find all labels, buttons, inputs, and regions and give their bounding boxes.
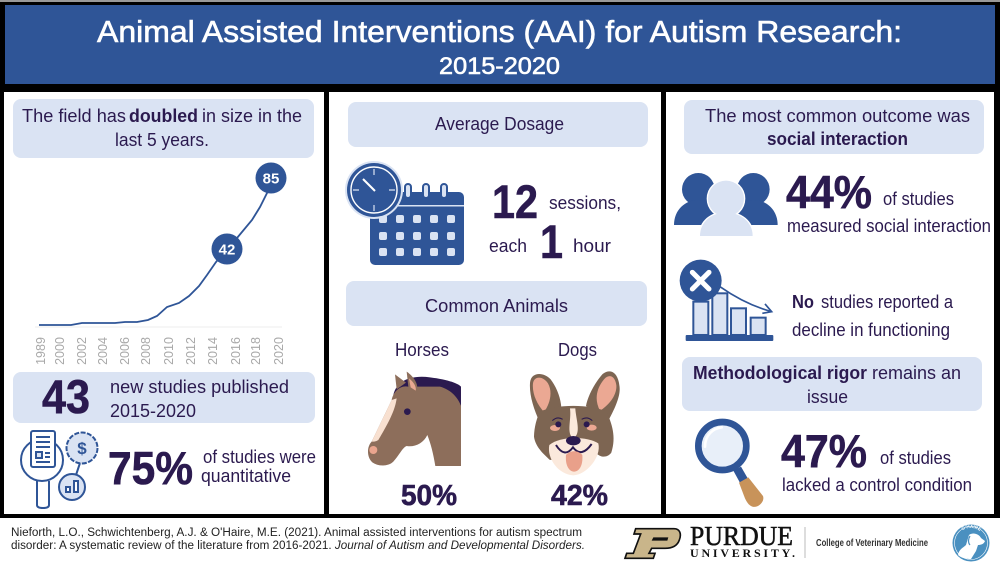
stat: horses 50%: 50% bbox=[401, 480, 457, 512]
stat: 43 new studies: 2015-2020 bbox=[110, 400, 196, 421]
text: no studies reported a decline: decline in functioning bbox=[792, 319, 950, 340]
wordmark: PURDUE: PURDUE bbox=[690, 521, 793, 551]
heading: methodological rigor: Methodological rigor bbox=[693, 362, 867, 383]
stat: 47% lacked control: of studies bbox=[880, 447, 951, 468]
stat: 47% lacked control: 47% bbox=[781, 425, 867, 477]
text: no studies reported a decline: No bbox=[792, 291, 814, 312]
data point: 85 bbox=[256, 162, 286, 194]
text: no studies reported a decline bbox=[792, 291, 954, 340]
logo: O'Haire lab dog badge: O'HAIRE bbox=[962, 524, 982, 531]
stat: 43 new studies: 43 bbox=[42, 370, 90, 423]
stat: 12 sessions, each 1 hour: 1 bbox=[540, 215, 563, 268]
heading: methodological rigor: remains an bbox=[872, 362, 961, 383]
heading: methodological rigor: issue bbox=[807, 386, 848, 407]
label: horses: Horses bbox=[395, 339, 449, 360]
line chart: publications by year: 2012 bbox=[184, 337, 198, 365]
icon: dog bbox=[530, 371, 620, 475]
heading: average dosage: Average Dosage bbox=[435, 113, 564, 134]
heading: common animals bbox=[346, 281, 647, 326]
panel: outcomes and rigor bbox=[666, 92, 994, 514]
line chart: publications by year: 2010 bbox=[162, 337, 176, 365]
line chart: publications by year: 2020 bbox=[272, 337, 286, 365]
text: no studies reported a decline: studies reported a bbox=[821, 291, 954, 312]
stat: 44% social interaction: 44% bbox=[786, 166, 872, 218]
icon: declining bars with cross bbox=[680, 260, 773, 341]
line chart: publications by year: 2002 bbox=[75, 337, 89, 365]
stat: 75% quantitative: 75% bbox=[108, 442, 193, 494]
stat: 43 new studies: new studies published bbox=[110, 376, 289, 397]
heading: field has doubled: doubled bbox=[129, 105, 198, 126]
line chart: publications by year: 2008 bbox=[139, 337, 153, 365]
icon: people group bbox=[674, 173, 778, 236]
divider and college name bbox=[805, 527, 928, 558]
icon: calendar and clock bbox=[345, 161, 464, 265]
stat: 12 sessions, each 1 hour: hour bbox=[573, 235, 611, 256]
citation: Nieforth, L.O., Schwichtenberg, A.J. & O'Haire, M.E. (2021). Animal assisted interventions for autism spectrum bbox=[11, 527, 582, 539]
heading: average dosage bbox=[348, 102, 648, 147]
stat: 12 sessions, each 1 hour: sessions, bbox=[549, 192, 621, 213]
line chart: publications by year: 2006 bbox=[118, 337, 132, 365]
line chart: publications by year: 2014 bbox=[206, 337, 220, 365]
subtitle: 2015-2020 bbox=[439, 53, 560, 80]
wordmark: UNIVERSITY: UNIVERSITY. bbox=[690, 546, 795, 560]
stat: 75% quantitative: of studies were bbox=[203, 446, 316, 467]
logo: O'Haire lab dog badge bbox=[952, 524, 990, 562]
heading: field has doubled: The field has bbox=[22, 105, 126, 126]
stat: 47% lacked control bbox=[781, 425, 972, 495]
logo: Purdue University bbox=[625, 521, 795, 560]
data point: 42: 42 bbox=[219, 242, 235, 258]
heading: most common outcome: The most common outcome was bbox=[705, 105, 970, 126]
stat: 12 sessions, each 1 hour: each bbox=[489, 235, 527, 256]
stat: 12 sessions, each 1 hour bbox=[489, 175, 621, 268]
divider and college name: College of Veterinary Medicine bbox=[816, 537, 928, 549]
line chart: publications by year: 1989 bbox=[34, 337, 48, 365]
stat: 43 new studies bbox=[13, 370, 315, 423]
heading: methodological rigor bbox=[682, 357, 982, 411]
line chart: publications by year: 2004 bbox=[96, 337, 110, 365]
stat: 44% social interaction: of studies bbox=[883, 188, 954, 209]
line chart: publications by year: 2018 bbox=[249, 337, 263, 365]
icon: magnifying glass bbox=[698, 422, 763, 507]
stat: 47% lacked control: lacked a control condition bbox=[782, 474, 972, 495]
line chart: publications by year: 2016 bbox=[229, 337, 243, 365]
line chart: publications by year: 2000 bbox=[53, 337, 67, 365]
icon: horse bbox=[368, 372, 461, 466]
citation bbox=[11, 527, 585, 552]
stat: dogs 42%: 42% bbox=[551, 480, 608, 512]
heading: field has doubled: in size in the bbox=[202, 105, 302, 126]
title: Animal Assisted Interventions (AAI) for Autism Research: bbox=[97, 14, 902, 49]
heading: common animals: Common Animals bbox=[425, 295, 568, 316]
panel: dosage and animals bbox=[329, 92, 661, 514]
heading: field has doubled: last 5 years. bbox=[115, 129, 209, 150]
stat: 75% quantitative: quantitative bbox=[201, 465, 291, 486]
heading: most common outcome: social interaction bbox=[767, 128, 908, 149]
icon: magnifier with document and charts bbox=[21, 431, 98, 508]
panel: field growth bbox=[4, 92, 324, 514]
stat: 75% quantitative bbox=[108, 442, 316, 494]
label: dogs: Dogs bbox=[558, 339, 597, 360]
icon: Purdue P bbox=[625, 529, 680, 558]
citation: disorder: A systematic review of the literature from 2016-2021. Journal of Autism and Developmental Disorders. bbox=[11, 540, 585, 552]
heading: most common outcome bbox=[684, 100, 984, 154]
stat: 12 sessions, each 1 hour: 12 bbox=[492, 175, 538, 228]
data point: 42 bbox=[212, 234, 242, 264]
data point: 85: 85 bbox=[263, 170, 279, 188]
title banner bbox=[5, 5, 995, 84]
icon: magnifier with document and charts: $ bbox=[77, 439, 87, 458]
heading: field has doubled bbox=[13, 99, 314, 158]
line chart: publications by year bbox=[34, 162, 286, 365]
stat: 44% social interaction bbox=[786, 166, 991, 236]
